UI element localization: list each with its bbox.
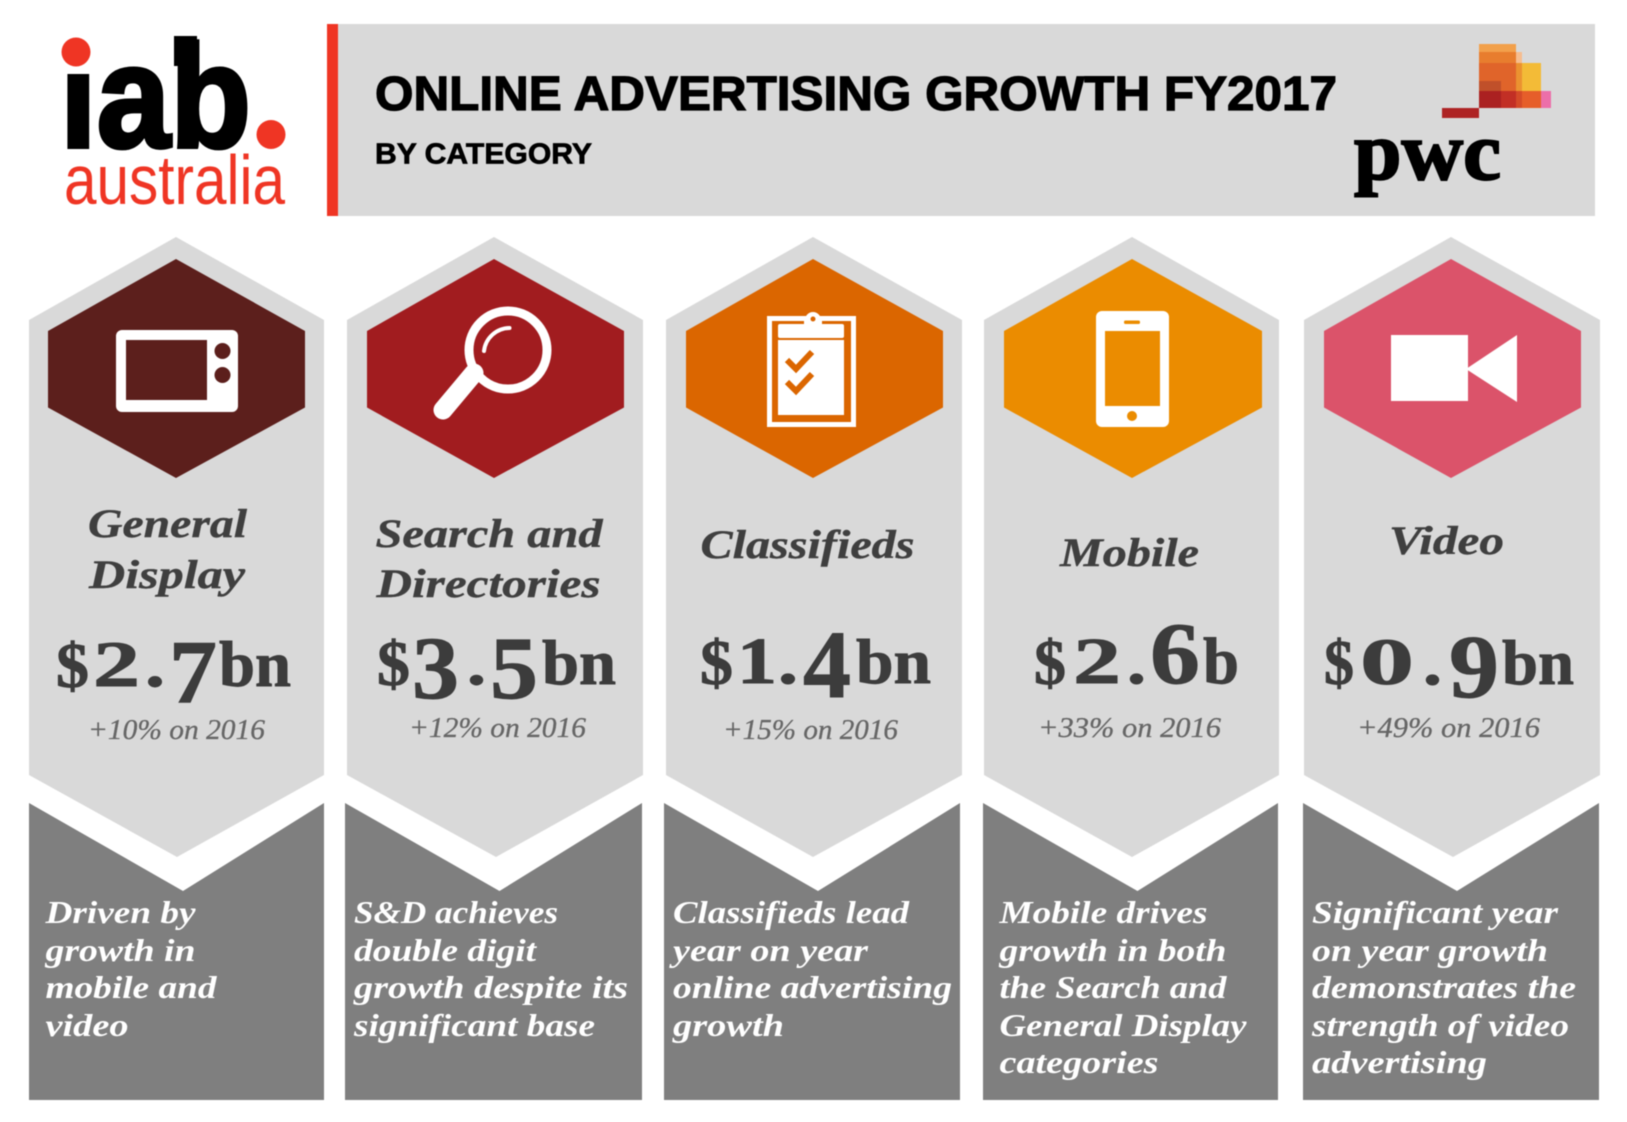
description box: [29, 803, 324, 1100]
value: $2.6b: .: [1127, 629, 1146, 697]
hexagon badge: [367, 259, 624, 478]
value: $3.5bn: 5: [490, 620, 538, 718]
category name: Video: [1389, 518, 1504, 563]
card background: [666, 237, 962, 857]
description text: the Search and: [1000, 969, 1228, 1005]
value: $2.7bn: $: [56, 630, 89, 701]
icon: clipboard checklist: [770, 312, 854, 424]
value: $1.4bn: [700, 611, 931, 718]
hexagon badge: [686, 259, 943, 478]
value: $2.6b: 2: [1073, 625, 1121, 698]
description text: [668, 894, 952, 1043]
value: $2.7bn: bn: [219, 629, 291, 701]
value: $2.7bn: 2: [93, 629, 140, 701]
growth: +49% on 2016: [1357, 712, 1541, 744]
logo wordmark: iab: iab: [60, 15, 251, 178]
description box: [664, 803, 960, 1100]
description text: Mobile drives: [998, 894, 1208, 930]
description text: Driven by: [44, 894, 196, 930]
value: $2.6b: b: [1203, 625, 1239, 698]
subtitle: BY CATEGORY: [375, 138, 592, 170]
value: $0.9bn: .: [1423, 630, 1442, 698]
value: $3.5bn: 3: [412, 620, 459, 718]
value: $2.7bn: .: [145, 629, 165, 701]
description text: S&D achieves: [354, 894, 558, 930]
description box: [1303, 803, 1599, 1100]
value: $1.4bn: .: [778, 629, 798, 697]
value: $2.6b: 6: [1150, 606, 1200, 703]
description box: [983, 803, 1278, 1100]
category name: Directories: [375, 561, 600, 606]
description text: online advertising: [673, 969, 952, 1005]
value: $0.9bn: bn: [1502, 627, 1574, 698]
description text: Significant year: [1312, 894, 1559, 930]
value: $1.4bn: 4: [803, 611, 851, 718]
value: $2.6b: [1034, 606, 1239, 703]
growth: +33% on 2016: [1038, 712, 1222, 744]
description text: double digit: [354, 932, 537, 968]
card background: [1304, 237, 1600, 857]
value: $2.7bn: [56, 623, 291, 722]
icon: smartphone: [1096, 311, 1169, 427]
value: $0.9bn: 9: [1449, 618, 1499, 717]
value: $2.7bn: 7: [169, 623, 217, 722]
value: $0.9bn: $: [1324, 627, 1354, 698]
growth: +12% on 2016: [409, 712, 586, 744]
description text: [44, 894, 218, 1043]
description text: year on year: [668, 932, 869, 968]
panel: Video: [1303, 237, 1600, 1100]
value: $3.5bn: $: [377, 628, 410, 699]
description text: video: [46, 1007, 128, 1043]
description text: growth in both: [998, 932, 1226, 968]
description text: [353, 894, 628, 1043]
value: $3.5bn: bn: [542, 628, 616, 698]
panel: General Display: [29, 237, 324, 1100]
title: ONLINE ADVERTISING GROWTH FY2017: [375, 68, 1337, 121]
banner background: [338, 24, 1595, 216]
value: $3.5bn: .: [467, 631, 486, 697]
banner red accent bar: [327, 24, 338, 216]
description box: [345, 803, 642, 1100]
description text: growth in: [44, 932, 196, 968]
growth: +10% on 2016: [88, 714, 266, 746]
category name: General: [88, 501, 248, 546]
card background: [347, 237, 643, 857]
description text: [1311, 894, 1576, 1080]
growth: +15% on 2016: [723, 714, 898, 746]
description text: mobile and: [46, 969, 218, 1005]
description text: significant base: [353, 1007, 595, 1043]
value: $0.9bn: 0: [1360, 626, 1414, 699]
category name: [88, 501, 248, 597]
value: $1.4bn: 1: [737, 625, 777, 698]
description text: advertising: [1312, 1044, 1487, 1080]
panel: Search and Directories: [345, 237, 643, 1100]
description text: demonstrates the: [1312, 969, 1576, 1005]
icon: magnifier: [443, 311, 547, 410]
logo: b ascender: [174, 36, 197, 66]
description text: on year growth: [1312, 932, 1548, 968]
logo: full stop dot: [256, 120, 286, 149]
logo: i dot: [62, 38, 90, 66]
hexagon badge: [48, 259, 305, 478]
logo: pwc wordmark: pwc: [1354, 105, 1501, 197]
category name: Display: [88, 552, 245, 597]
logo wordmark: australia: australia: [64, 141, 285, 219]
hexagon badge: [1004, 259, 1262, 478]
hexagon badge: [1324, 259, 1581, 478]
category name: Search and: [376, 511, 604, 556]
description text: growth despite its: [353, 969, 628, 1005]
value: $2.6b: $: [1034, 627, 1066, 698]
description text: growth: [672, 1007, 784, 1043]
panel: Mobile: [983, 237, 1279, 1100]
description text: General Display: [1000, 1007, 1247, 1043]
logo: pwc blocks: [1442, 44, 1551, 118]
category name: [375, 511, 604, 606]
logo: iab australia: [60, 35, 286, 206]
header banner: [327, 24, 1595, 216]
value: $1.4bn: bn: [856, 626, 931, 697]
card background: [29, 237, 324, 857]
value: $1.4bn: $: [700, 627, 733, 698]
icon: microwave: [116, 330, 238, 412]
description text: categories: [1000, 1044, 1158, 1080]
card background: [984, 237, 1279, 857]
panel: Classifieds: [664, 237, 962, 1100]
category name: Classifieds: [700, 522, 914, 567]
value: $3.5bn: [377, 620, 616, 718]
category name: Mobile: [1059, 530, 1199, 575]
icon: video camera: [1391, 335, 1517, 402]
description text: strength of video: [1311, 1007, 1569, 1043]
description text: [998, 894, 1247, 1080]
description text: Classifieds lead: [673, 894, 910, 930]
value: $0.9bn: [1324, 618, 1574, 717]
